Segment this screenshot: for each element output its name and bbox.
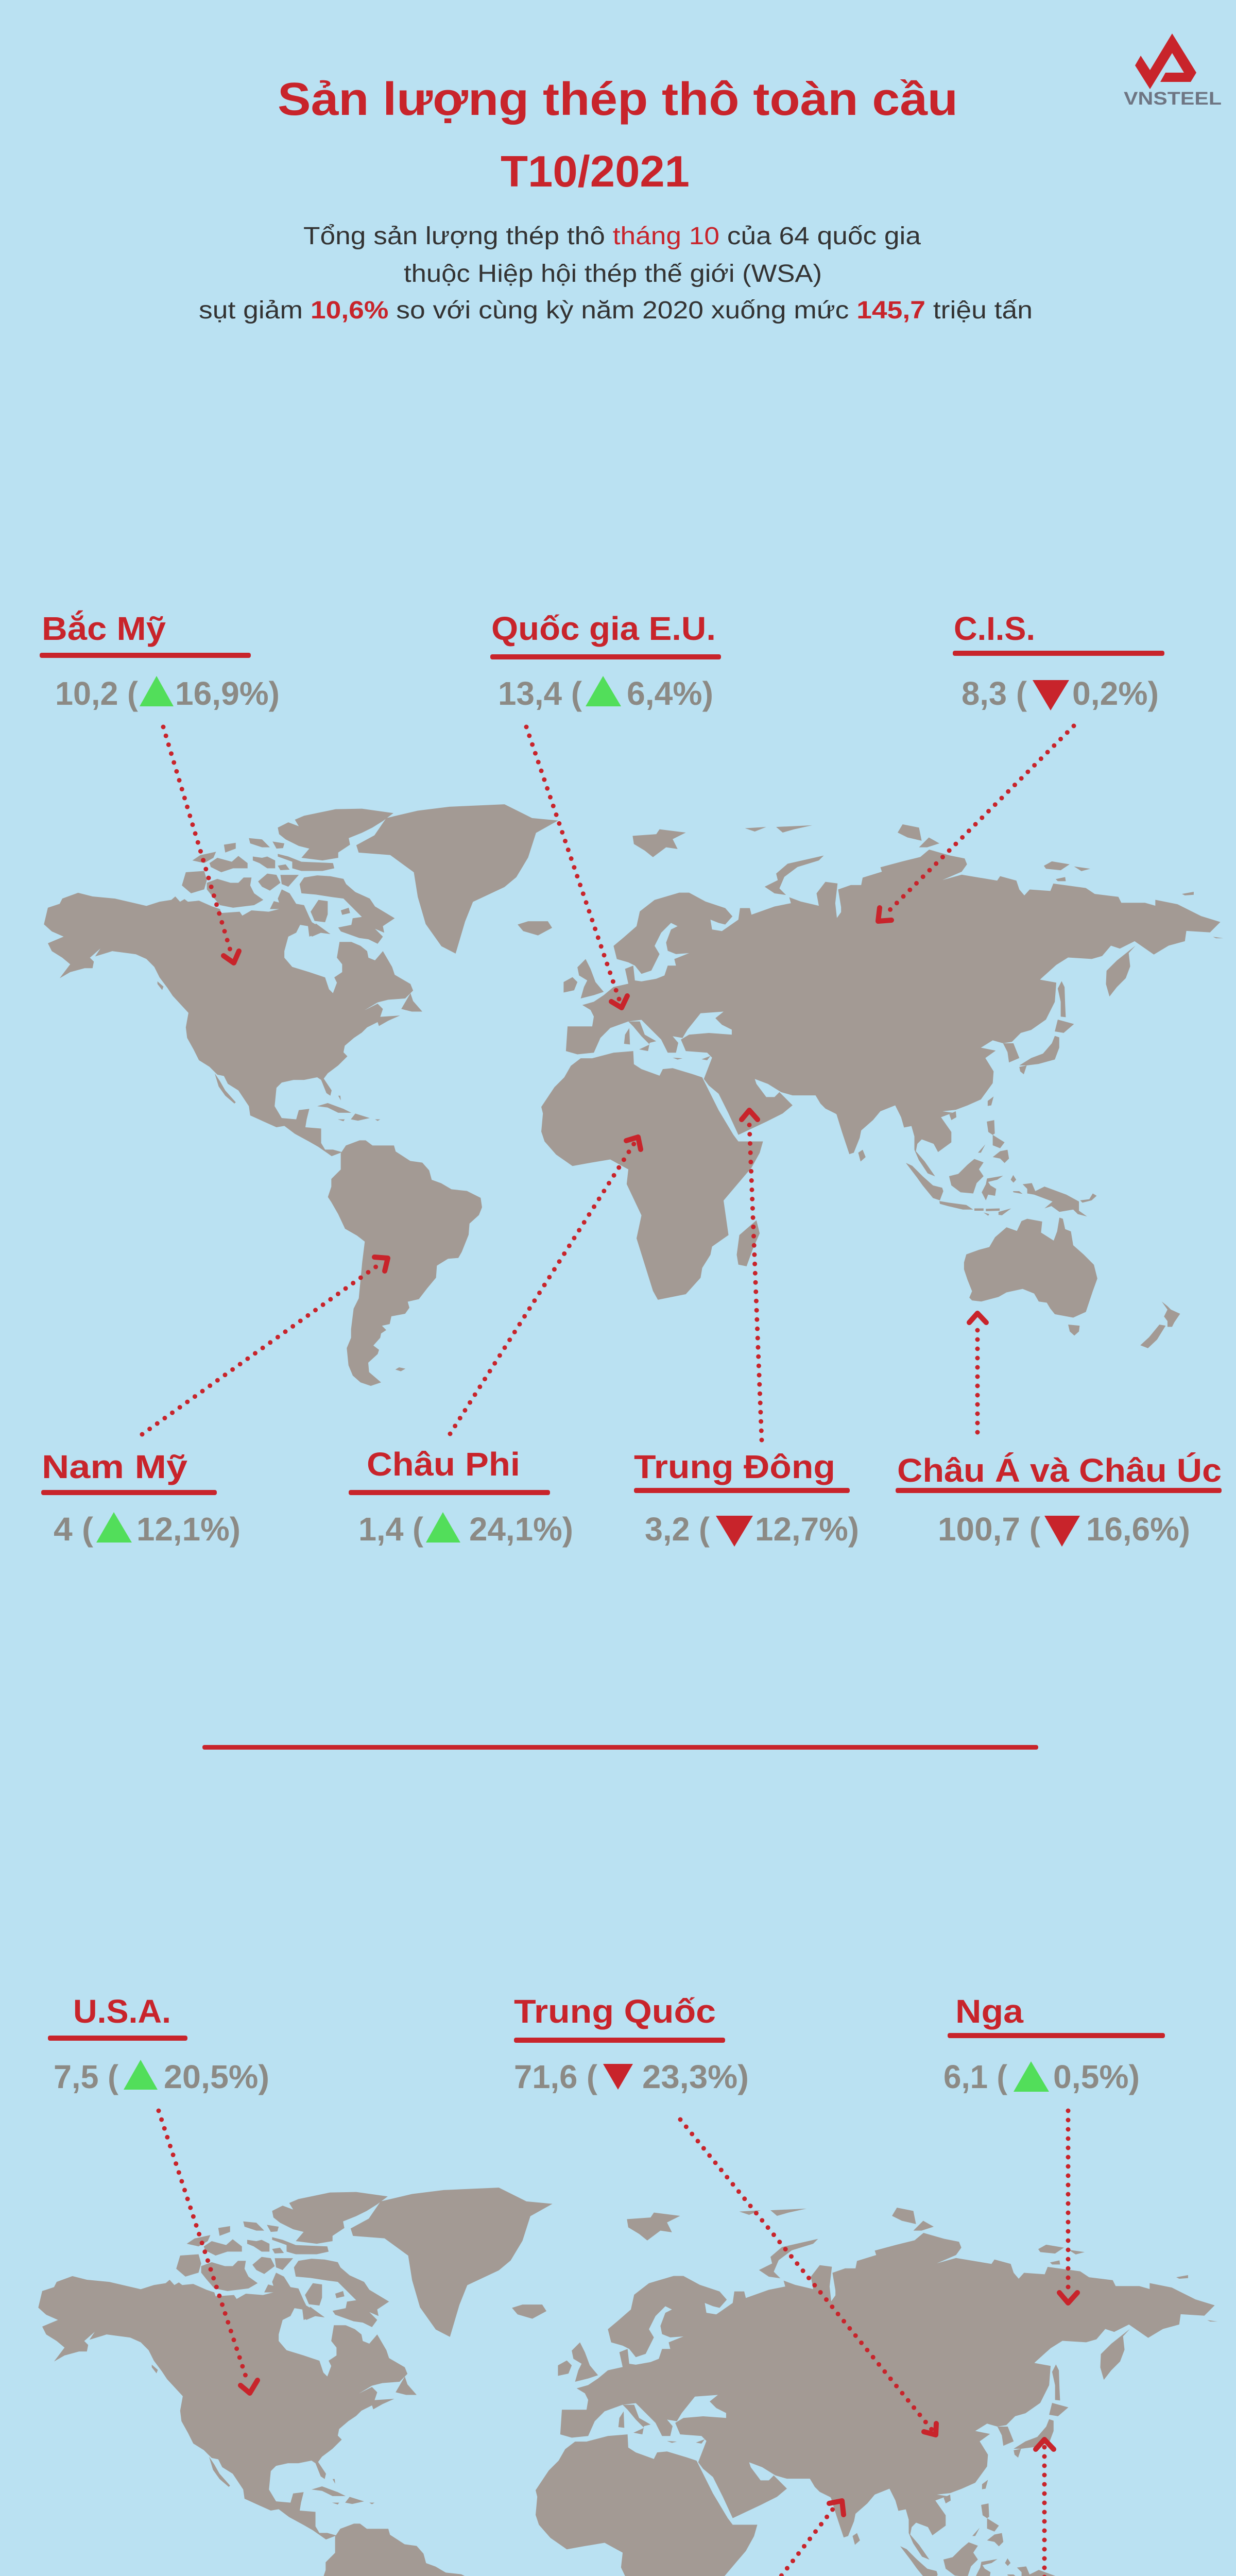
- arrow: Châu Á và Châu Úc: [969, 1313, 986, 1432]
- value: 3,2 (: [645, 1511, 710, 1548]
- arrow: Nhật Bản: [1036, 2439, 1054, 2576]
- arrow: Quốc gia E.U.: [526, 727, 627, 1008]
- arrow: Châu Phi: [450, 1137, 641, 1434]
- arrow: Trung Đông: [742, 1110, 762, 1440]
- value: 0,2%): [1072, 675, 1159, 712]
- heading: Châu Phi: [367, 1446, 520, 1483]
- value: [645, 1511, 859, 1548]
- heading: Trung Đông: [634, 1448, 835, 1485]
- panel: Nga: [943, 1993, 1165, 2095]
- arrow: C.I.S.: [878, 726, 1074, 921]
- value: 24,1%): [469, 1511, 573, 1548]
- value: 8,3 (: [962, 675, 1027, 712]
- arrow: U.S.A.: [159, 2111, 258, 2393]
- panel: Châu Á và Châu Úc: [896, 1452, 1222, 1548]
- value: [54, 1511, 241, 1548]
- logo: VNSTEEL: [1124, 33, 1222, 109]
- value: 6,4%): [627, 675, 713, 712]
- intro text block: Tổng sản lượng thép thô tháng 10 của 64 quốc gia: [303, 223, 921, 250]
- value: 71,6 (: [514, 2058, 598, 2095]
- value: [938, 1511, 1190, 1548]
- value: [498, 675, 713, 712]
- value: 10,2 (: [55, 675, 139, 712]
- value: 100,7 (: [938, 1511, 1041, 1548]
- panel: U.S.A.: [48, 1993, 269, 2095]
- intro text block: thuộc Hiệp hội thép thế giới (WSA): [404, 260, 822, 287]
- value: 1,4 (: [358, 1511, 424, 1548]
- value: 16,9%): [175, 675, 280, 712]
- logo: VNSTEEL: VNSTEEL: [1124, 89, 1222, 109]
- heading: Trung Quốc: [514, 1993, 716, 2030]
- value: 12,7%): [755, 1511, 859, 1548]
- heading: C.I.S.: [954, 610, 1035, 647]
- value: 12,1%): [136, 1511, 241, 1548]
- panel: Trung Quốc: [514, 1993, 749, 2095]
- world map: countries: [38, 2188, 1217, 2576]
- value: 13,4 (: [498, 675, 582, 712]
- intro text block: sụt giảm 10,6% so với cùng kỳ năm 2020 xuống mức 145,7 triệu tấn: [199, 297, 1033, 324]
- value: [943, 2058, 1140, 2095]
- value: 16,6%): [1086, 1511, 1190, 1548]
- arrow: Ấn Độ: [594, 2501, 844, 2576]
- heading: Nga: [955, 1993, 1023, 2030]
- panel: Châu Phi: [349, 1446, 573, 1548]
- heading: Châu Á và Châu Úc: [897, 1452, 1222, 1489]
- value: 4 (: [54, 1511, 94, 1548]
- panel: Trung Đông: [634, 1448, 859, 1548]
- value: 7,5 (: [54, 2058, 119, 2095]
- title: Sản lượng thép thô toàn cầu: [278, 74, 958, 125]
- panel: C.I.S.: [953, 610, 1164, 712]
- value: 23,3%): [642, 2058, 749, 2095]
- arrow: Nam Mỹ: [142, 1257, 388, 1434]
- panel: Bắc Mỹ: [40, 610, 280, 712]
- arrow: Bắc Mỹ: [163, 727, 239, 963]
- value: 20,5%): [164, 2058, 269, 2095]
- world map: regions: [44, 804, 1223, 1386]
- value: [514, 2058, 749, 2095]
- value: 6,1 (: [943, 2058, 1008, 2095]
- heading: Bắc Mỹ: [42, 610, 166, 647]
- arrow: Trung Quốc: [680, 2120, 936, 2435]
- panel: Nam Mỹ: [41, 1448, 241, 1548]
- heading: U.S.A.: [73, 1993, 171, 2030]
- heading: Quốc gia E.U.: [491, 610, 716, 647]
- value: [54, 2058, 269, 2095]
- panel: Quốc gia E.U.: [490, 610, 721, 712]
- value: 0,5%): [1053, 2058, 1140, 2095]
- intro text block: [199, 223, 1033, 324]
- value: [962, 675, 1159, 712]
- value: [55, 675, 280, 712]
- subtitle: period: T10/2021: [501, 147, 690, 196]
- value: [358, 1511, 573, 1548]
- heading: Nam Mỹ: [42, 1448, 187, 1485]
- arrow: Nga: [1059, 2111, 1077, 2303]
